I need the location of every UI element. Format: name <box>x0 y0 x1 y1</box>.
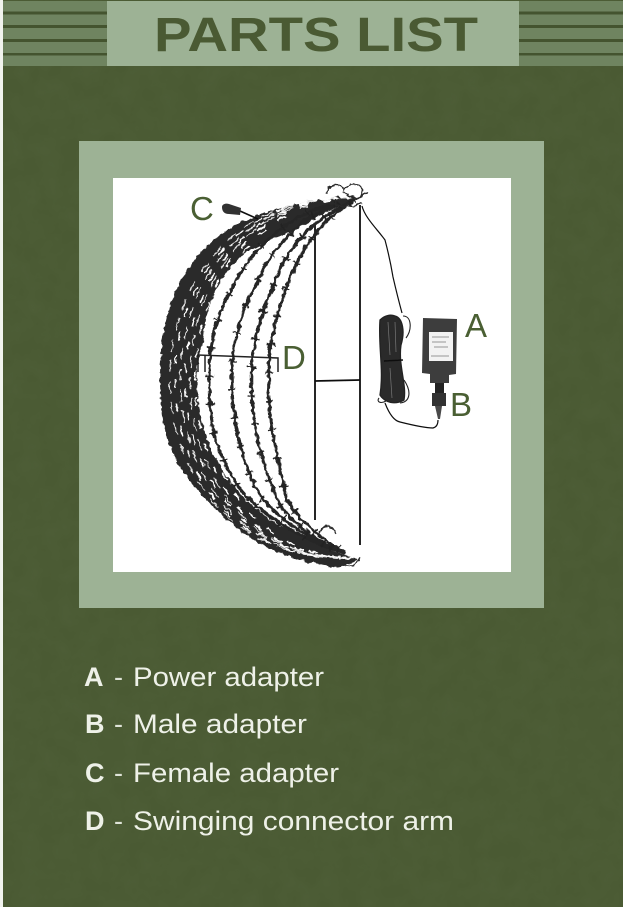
parts legend <box>84 662 454 836</box>
label C: C <box>190 190 214 227</box>
swinging frame wires <box>315 205 360 545</box>
connector arm <box>198 355 278 372</box>
light strands crescent <box>160 184 368 567</box>
icon: power adapter <box>422 318 457 419</box>
item B: Male adapter <box>133 709 307 739</box>
item A: A <box>84 662 104 692</box>
header band <box>3 1 623 66</box>
cable to coil <box>362 206 402 313</box>
item B: B <box>85 709 104 739</box>
icon: cable coil <box>378 315 410 403</box>
wire loops <box>318 184 368 566</box>
label B: B <box>450 386 472 423</box>
item D: D <box>85 806 104 836</box>
label A: A <box>465 307 487 344</box>
dense outer bundle <box>160 198 360 567</box>
title: PARTS LIST <box>154 9 478 62</box>
label D: D <box>282 339 306 376</box>
item D: - <box>114 806 123 836</box>
item C: Female adapter <box>133 758 339 788</box>
item C: C <box>85 758 104 788</box>
clips on strands <box>209 200 355 553</box>
icon: female adapter <box>222 204 258 219</box>
item A: Power adapter <box>133 662 324 692</box>
item C: - <box>114 758 123 788</box>
title plate <box>107 1 519 66</box>
cable to adapter <box>385 403 438 428</box>
photo frame <box>79 141 544 608</box>
right stripes <box>519 1 623 66</box>
photo panel <box>113 178 511 572</box>
item B: - <box>114 709 123 739</box>
item A: - <box>114 662 123 692</box>
left stripes <box>3 1 107 66</box>
separated strands <box>209 200 355 553</box>
item D: Swinging connector arm <box>133 806 454 836</box>
